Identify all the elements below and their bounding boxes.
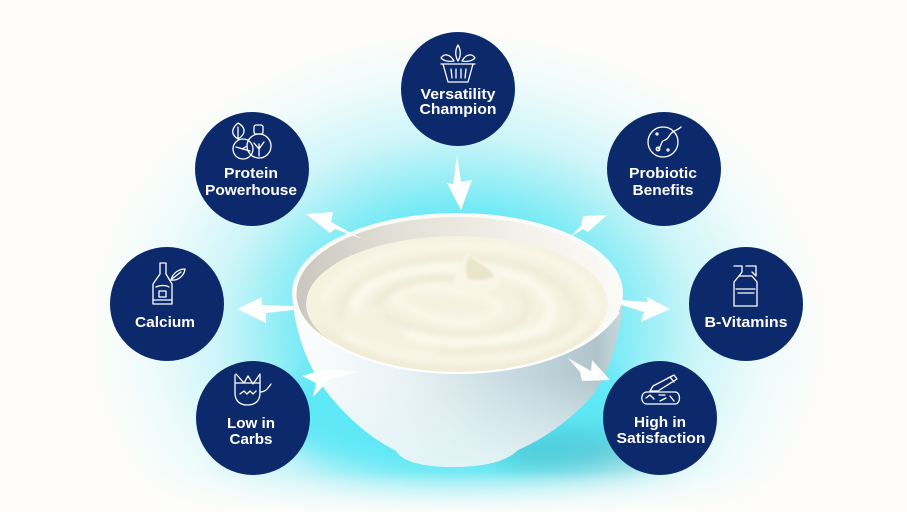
arrow: to high in satisfaction — [568, 358, 610, 381]
icon: basket with leaves — [441, 45, 475, 82]
icon: bottle and leaf — [153, 263, 185, 304]
bowl body — [292, 293, 623, 467]
label: Low in — [227, 415, 275, 432]
panel: versatility champion — [401, 32, 515, 146]
label: Versatility — [420, 86, 496, 103]
panel: b-vitamins — [689, 247, 803, 361]
panel: versatility champion: Champion — [420, 101, 496, 118]
arrow: to probiotic benefits — [570, 215, 607, 237]
yogurt swirl — [306, 236, 608, 372]
panel: low in carbs — [196, 361, 310, 475]
yogurt peak — [455, 254, 496, 288]
panel: probiotic benefits: Benefits — [632, 182, 694, 199]
arrow: to b-vitamins — [620, 297, 670, 322]
icon: spoon and bar — [642, 375, 680, 404]
label: Calcium — [135, 314, 195, 331]
icon: cup with zigzag — [235, 374, 271, 405]
arrow: to versatility champion — [447, 155, 472, 210]
panel: protein powerhouse — [195, 112, 309, 226]
panel: probiotic benefits — [607, 112, 721, 226]
icon: microbe circle — [648, 127, 681, 157]
panel: high in satisfaction — [603, 361, 717, 475]
icon: leaves and bottle — [233, 123, 271, 159]
label: B-Vitamins — [704, 314, 788, 331]
label: Probiotic — [629, 165, 697, 182]
bowl rim — [292, 213, 623, 373]
label: Protein — [224, 165, 278, 182]
icon: vitamin bottle — [734, 266, 757, 306]
arrow: to calcium — [237, 297, 293, 323]
panel: low in carbs: Carbs — [230, 431, 272, 448]
arrow: to protein powerhouse — [306, 212, 362, 239]
panel: protein powerhouse: Powerhouse — [205, 182, 297, 199]
panel: high in satisfaction: Satisfaction — [616, 430, 706, 447]
panel: calcium — [110, 247, 224, 361]
yogurt bowl — [292, 213, 623, 467]
label: High in — [634, 414, 686, 431]
background with cyan glow — [122, 61, 794, 508]
arrow: to low in carbs — [302, 369, 357, 397]
